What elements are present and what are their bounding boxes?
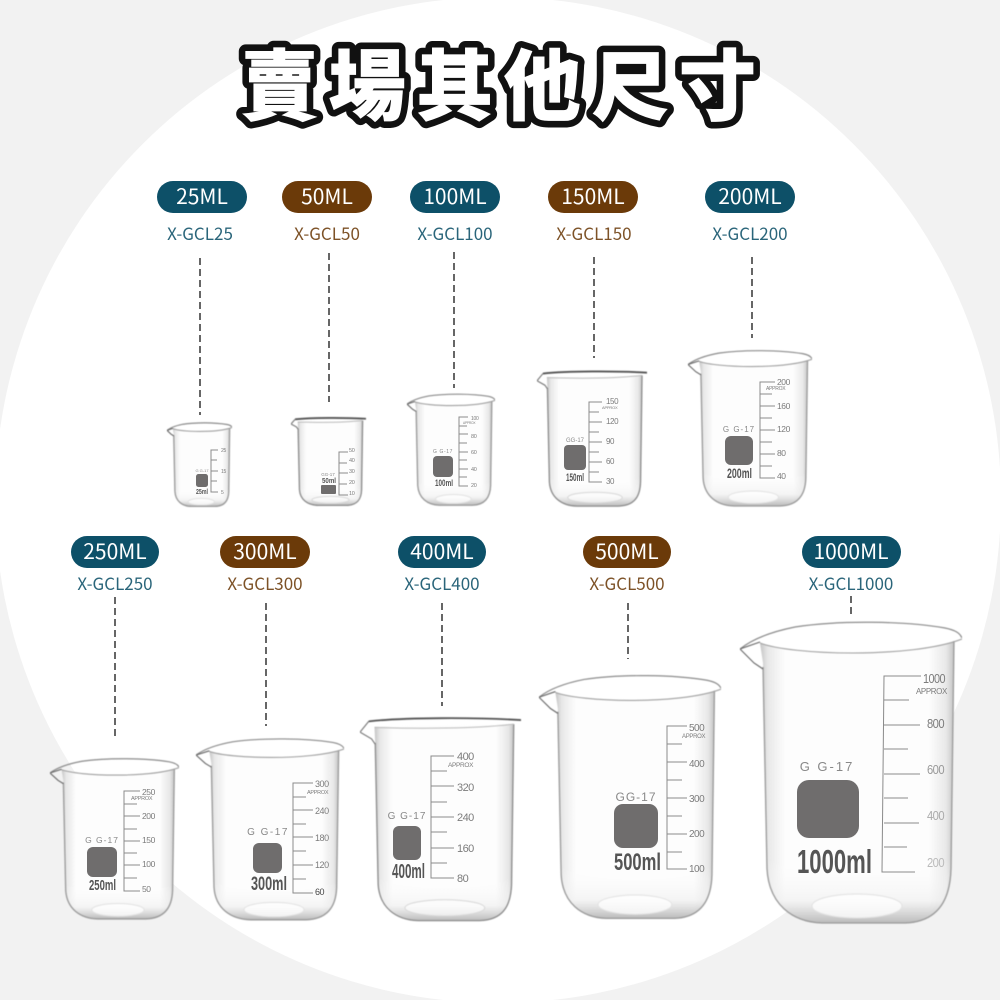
beaker 400ml: 160 [457,843,474,855]
label: 50ML: 50ML [301,181,353,211]
label: 100ML [410,181,500,245]
beaker 150ml [537,371,647,506]
beaker 100ml [407,394,495,505]
label: 300ML [220,536,310,595]
beaker 100ml: APPROX [463,421,476,425]
beaker 500ml: 300 [689,794,705,805]
beaker 200ml: 200 [777,377,791,387]
beaker 400ml: 80 [457,873,469,885]
title: 賣場其他尺寸 [241,26,767,137]
beaker 200ml: 80 [777,448,786,458]
beaker 25ml: 15 [221,469,227,475]
beaker 100ml: 100 [471,416,479,422]
beaker 1000ml: 400 [927,809,945,823]
beaker 300ml: G G-17 [247,827,289,838]
label: 200ML: 200ML [718,181,782,211]
beaker 25ml: 25 [221,448,227,454]
label: 300ML: X-GCL300 [227,570,303,595]
beaker 300ml: 300 [315,779,329,789]
beaker 100ml: 60 [471,450,477,456]
beaker 300ml: 300ml [251,874,287,895]
label: 50ML [282,181,372,245]
label: 300ML: 300ML [233,536,297,566]
label: 400ML [398,536,486,595]
beaker 100ml: G G-17 [433,449,453,455]
beaker 400ml: 320 [457,782,474,794]
beaker 50ml: GG-17 [321,472,335,477]
beaker 150ml: 150 [606,397,619,406]
beaker 50ml: 20 [349,480,355,486]
beaker 400ml: G G-17 [388,811,426,822]
label: 100ML: 100ML [423,181,487,211]
beaker 150ml: 90 [606,437,615,446]
label: 500ML: X-GCL500 [589,570,665,595]
beaker 1000ml: APPROX [916,687,948,696]
beaker 500ml: GG-17 [615,790,657,804]
label: 250ML: 250ML [83,536,147,566]
label: 150ML: 150ML [561,181,625,211]
beaker 500ml [539,676,721,918]
beaker 1000ml [740,622,962,923]
label: 250ML [71,536,159,595]
beaker 500ml: 500ml [614,849,661,876]
beaker 400ml [360,718,521,921]
beaker 200ml [688,351,812,506]
beaker 25ml: 25ml [196,489,208,496]
beaker 150ml: 150ml [566,472,584,484]
label: 500ML: 500ML [595,536,659,566]
beaker 50ml [291,418,366,505]
beaker 300ml [196,739,344,920]
beaker 100ml: 40 [471,467,477,473]
label: 1000ML: X-GCL1000 [809,570,893,595]
beaker 100ml: 80 [471,434,477,440]
beaker 1000ml: 1000ml [797,843,872,880]
beaker 1000ml: 1000 [923,672,946,686]
beaker 200ml: 200ml [727,465,752,481]
beaker 200ml: APPROX [766,386,786,392]
label: 250ML: X-GCL250 [77,570,153,595]
beaker 250ml [50,759,179,919]
beaker 50ml: 40 [349,458,355,464]
beaker 50ml: 30 [349,469,355,475]
label: 1000ML [802,536,901,595]
beaker 250ml: 200 [142,811,156,821]
beaker 50ml: 50ml [322,478,336,485]
beaker 50ml: 10 [349,491,355,497]
beaker 250ml: 250ml [89,877,116,894]
beaker 400ml: 240 [457,812,474,824]
beaker 1000ml: 600 [927,763,945,777]
beaker 150ml: 120 [606,417,619,426]
label: 400ML: 400ML [410,536,474,566]
label: 150ML [548,181,638,245]
label: 1000ML: 1000ML [813,536,889,566]
beaker 300ml: 180 [315,833,329,843]
beaker 500ml: 200 [689,829,705,840]
label: 50ML: X-GCL50 [294,220,360,245]
title: 賣場其他尺寸 [241,26,767,137]
beaker 200ml: 160 [777,401,791,411]
beaker 250ml: 50 [142,884,151,894]
beaker 300ml: 60 [315,887,325,897]
beaker 100ml: 100ml [435,478,453,488]
label: 100ML: X-GCL100 [417,220,493,245]
beaker 250ml: 100 [142,859,156,869]
beaker 25ml: G G-17 [195,468,209,473]
label: 400ML: X-GCL400 [404,570,480,595]
beaker 300ml: APPROX [307,790,329,796]
beaker 400ml: APPROX [448,762,474,769]
beaker 150ml: 60 [606,457,615,466]
label: 200ML: X-GCL200 [712,220,788,245]
beaker 400ml: 400ml [392,861,425,883]
label: 25ML: X-GCL25 [167,220,233,245]
beaker 500ml: 400 [689,759,705,770]
beaker 300ml: 120 [315,860,329,870]
label: 500ML [583,536,671,595]
beaker 1000ml: G G-17 [800,759,854,774]
beaker 150ml: 30 [606,477,615,486]
beaker 500ml: 500 [689,723,705,734]
beaker 500ml: 100 [689,864,705,875]
label: 25ML [157,181,247,245]
beaker 250ml: 250 [142,787,156,797]
beaker 250ml: APPROX [131,796,153,802]
label: 200ML [705,181,795,245]
beaker 150ml: APPROX [602,405,618,410]
beaker 200ml: 120 [777,424,791,434]
beaker 400ml: 400 [457,751,474,763]
beaker 250ml: G G-17 [85,835,119,845]
beaker 200ml: 40 [777,471,786,481]
beaker 150ml: GG-17 [566,438,585,444]
label: 150ML: X-GCL150 [556,220,632,245]
label: 25ML: 25ML [176,181,228,211]
beaker 25ml: 5 [221,490,224,496]
beaker 1000ml: 200 [927,856,945,870]
beaker 250ml: 150 [142,835,156,845]
beaker 1000ml: 800 [927,717,945,731]
beaker 300ml: 240 [315,806,329,816]
beaker 500ml: APPROX [682,734,706,740]
beaker 25ml [167,423,232,506]
beaker 200ml: G G-17 [723,425,755,434]
beaker 100ml: 20 [471,483,477,489]
beaker 50ml: 50 [349,448,355,454]
